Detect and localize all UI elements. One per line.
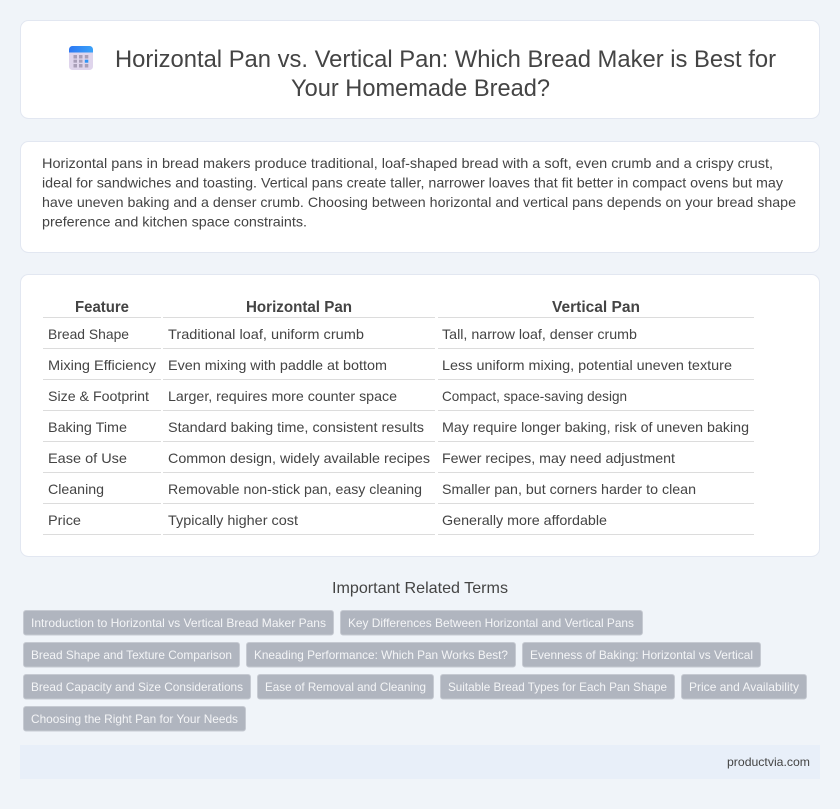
table header bbox=[75, 299, 640, 316]
row: price: Price bbox=[48, 512, 81, 528]
intro paragraph: Horizontal pans in bread makers produce traditional, loaf-shaped bread with a soft, even crumb and a crispy crust, bbox=[42, 155, 773, 171]
row: size and footprint: Size & Footprint bbox=[48, 388, 149, 404]
row: cleaning: Removable non-stick pan, easy cleaning bbox=[168, 481, 422, 497]
row: mixing efficiency: Even mixing with paddle at bottom bbox=[168, 357, 387, 373]
row: price bbox=[48, 512, 607, 528]
table header: Horizontal Pan bbox=[246, 299, 352, 316]
tag: Choosing the Right Pan for Your Needs bbox=[31, 712, 238, 726]
row: baking time: May require longer baking, risk of uneven baking bbox=[442, 419, 749, 435]
tag bbox=[340, 610, 642, 635]
tag bbox=[246, 642, 516, 667]
icon: calendar grid bbox=[69, 46, 93, 70]
tag: Bread Capacity and Size Considerations bbox=[31, 680, 243, 694]
intro paragraph: have uneven baking and a denser crumb. Choosing between horizontal and vertical pans depends on your bread shape bbox=[42, 194, 796, 210]
row: cleaning: Smaller pan, but corners harder to clean bbox=[442, 481, 696, 497]
tag: Key Differences Between Horizontal and Vertical Pans bbox=[348, 616, 634, 630]
tag bbox=[24, 610, 334, 635]
row: bread shape: Bread Shape bbox=[48, 326, 129, 342]
panel: comparison table bbox=[20, 274, 820, 556]
title bbox=[115, 46, 776, 102]
row: mixing efficiency: Less uniform mixing, potential uneven texture bbox=[442, 357, 732, 373]
table header: Vertical Pan bbox=[552, 299, 640, 316]
tag bbox=[24, 706, 246, 731]
tag bbox=[522, 642, 760, 667]
footer: productvia.com bbox=[727, 755, 810, 769]
intro paragraph: preference and kitchen space constraints. bbox=[42, 214, 307, 230]
tag bbox=[682, 674, 806, 699]
tag: Kneading Performance: Which Pan Works Best? bbox=[254, 648, 508, 662]
row: ease of use bbox=[48, 450, 675, 466]
tag: Ease of Removal and Cleaning bbox=[265, 680, 426, 694]
row: bread shape: Traditional loaf, uniform crumb bbox=[168, 326, 364, 342]
heading: important related terms: Important Related Terms bbox=[332, 580, 508, 597]
row: cleaning bbox=[48, 481, 696, 497]
tag bbox=[258, 674, 434, 699]
row: baking time: Baking Time bbox=[48, 419, 127, 435]
tag bbox=[24, 642, 240, 667]
footer bbox=[20, 745, 820, 779]
row: ease of use: Fewer recipes, may need adjustment bbox=[442, 450, 675, 466]
row: size and footprint: Compact, space-saving design bbox=[442, 388, 627, 404]
row: baking time: Standard baking time, consistent results bbox=[168, 419, 424, 435]
tag: Introduction to Horizontal vs Vertical Bread Maker Pans bbox=[31, 616, 326, 630]
row: ease of use: Ease of Use bbox=[48, 450, 127, 466]
tag: Price and Availability bbox=[689, 680, 799, 694]
row: size and footprint: Larger, requires more counter space bbox=[168, 388, 397, 404]
table header: Feature bbox=[75, 299, 129, 316]
row: ease of use: Common design, widely available recipes bbox=[168, 450, 430, 466]
row: price: Typically higher cost bbox=[168, 512, 298, 528]
tag: Suitable Bread Types for Each Pan Shape bbox=[448, 680, 667, 694]
title: Horizontal Pan vs. Vertical Pan: Which Bread Maker is Best for bbox=[115, 46, 776, 73]
row: price: Generally more affordable bbox=[442, 512, 607, 528]
intro paragraph bbox=[42, 155, 796, 230]
tag: Evenness of Baking: Horizontal vs Vertical bbox=[530, 648, 753, 662]
intro paragraph: ideal for sandwiches and toasting. Vertical pans create taller, narrower loaves that fit better in compact ovens but may bbox=[42, 174, 783, 190]
tag: Bread Shape and Texture Comparison bbox=[31, 648, 232, 662]
tag bbox=[440, 674, 674, 699]
row: baking time bbox=[48, 419, 749, 435]
panel: introduction bbox=[20, 142, 820, 252]
tag bbox=[24, 674, 250, 699]
row: size and footprint bbox=[48, 388, 627, 404]
row: bread shape: Tall, narrow loaf, denser crumb bbox=[442, 326, 637, 342]
row: bread shape bbox=[48, 326, 637, 342]
title panel bbox=[20, 20, 820, 118]
related term tags bbox=[24, 610, 806, 731]
row: cleaning: Cleaning bbox=[48, 481, 104, 497]
title: Your Homemade Bread? bbox=[291, 75, 550, 102]
row: mixing efficiency bbox=[48, 357, 732, 373]
row: mixing efficiency: Mixing Efficiency bbox=[48, 357, 156, 373]
